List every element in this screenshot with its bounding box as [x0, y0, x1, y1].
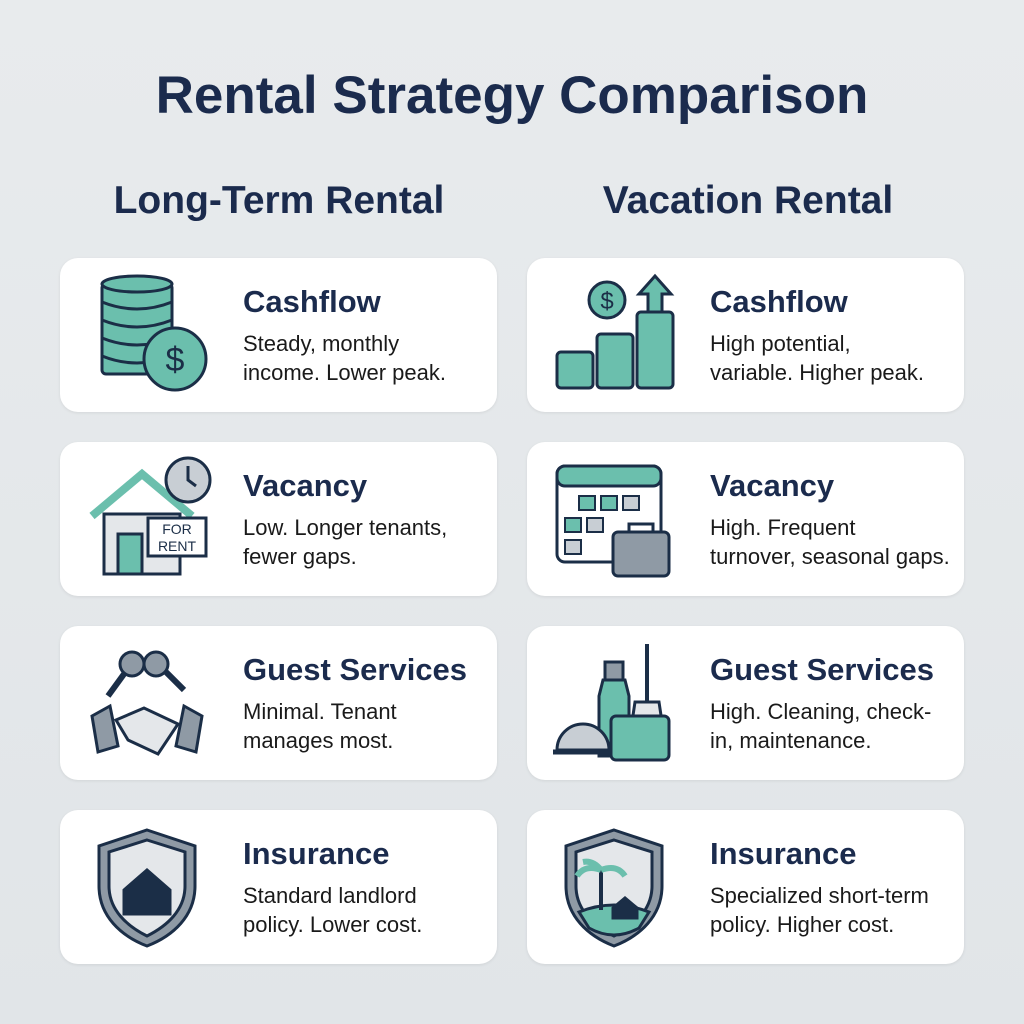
card: VR cashflow: variable. Higher peak.: [710, 360, 924, 385]
icon: house for rent: FOR: [162, 521, 192, 537]
card: LT insurance: Standard landlord: [243, 883, 417, 908]
card: LT vacancy: Low. Longer tenants,: [243, 515, 447, 540]
card: LT insurance: [60, 810, 497, 964]
card: LT cashflow: Cashflow: [243, 284, 381, 319]
card: VR insurance: policy. Higher cost.: [710, 912, 894, 937]
card: VR guest services: High. Cleaning, check-: [710, 699, 931, 724]
card: VR guest services: [527, 626, 964, 780]
icon: shield with palm: [564, 828, 664, 948]
card: VR vacancy: High. Frequent: [710, 515, 856, 540]
icon: keys and handshake: [90, 650, 204, 756]
icon: calendar and suitcase: [556, 464, 670, 578]
card: LT cashflow: income. Lower peak.: [243, 360, 446, 385]
card: LT guest services: Guest Services: [243, 652, 467, 687]
card: VR cashflow: High potential,: [710, 331, 851, 356]
icon: growing coins: [556, 274, 674, 390]
card: VR insurance: Insurance: [710, 836, 856, 871]
card: LT cashflow: [60, 258, 497, 412]
card: VR insurance: [527, 810, 964, 964]
icon: coin stack: $: [166, 341, 185, 379]
card: LT guest services: manages most.: [243, 728, 393, 753]
card: LT guest services: Minimal. Tenant: [243, 699, 397, 724]
card: LT insurance: Insurance: [243, 836, 389, 871]
card: VR cashflow: [527, 258, 964, 412]
card: LT guest services: [60, 626, 497, 780]
card: VR insurance: Specialized short-term: [710, 883, 929, 908]
title: Rental Strategy Comparison: [156, 66, 868, 125]
card: LT cashflow: Steady, monthly: [243, 331, 399, 356]
heading: vacation: Vacation Rental: [603, 179, 893, 222]
card: LT vacancy: Vacancy: [243, 468, 367, 503]
icon: house for rent: RENT: [158, 538, 196, 554]
card: LT vacancy: [60, 442, 497, 596]
icon: house for rent: [90, 456, 212, 576]
icon: coin stack: [100, 274, 208, 392]
heading: long-term: Long-Term Rental: [114, 179, 444, 222]
icon: shield with house: [98, 828, 196, 948]
icon: growing coins: $: [600, 288, 614, 315]
card: VR vacancy: Vacancy: [710, 468, 834, 503]
card: LT vacancy: fewer gaps.: [243, 544, 357, 569]
card: LT insurance: policy. Lower cost.: [243, 912, 422, 937]
card: VR guest services: Guest Services: [710, 652, 934, 687]
card: VR cashflow: Cashflow: [710, 284, 848, 319]
card: VR vacancy: [527, 442, 964, 596]
card: VR guest services: in, maintenance.: [710, 728, 871, 753]
card: VR vacancy: turnover, seasonal gaps.: [710, 544, 950, 569]
icon: cleaning and bell: [553, 644, 670, 762]
